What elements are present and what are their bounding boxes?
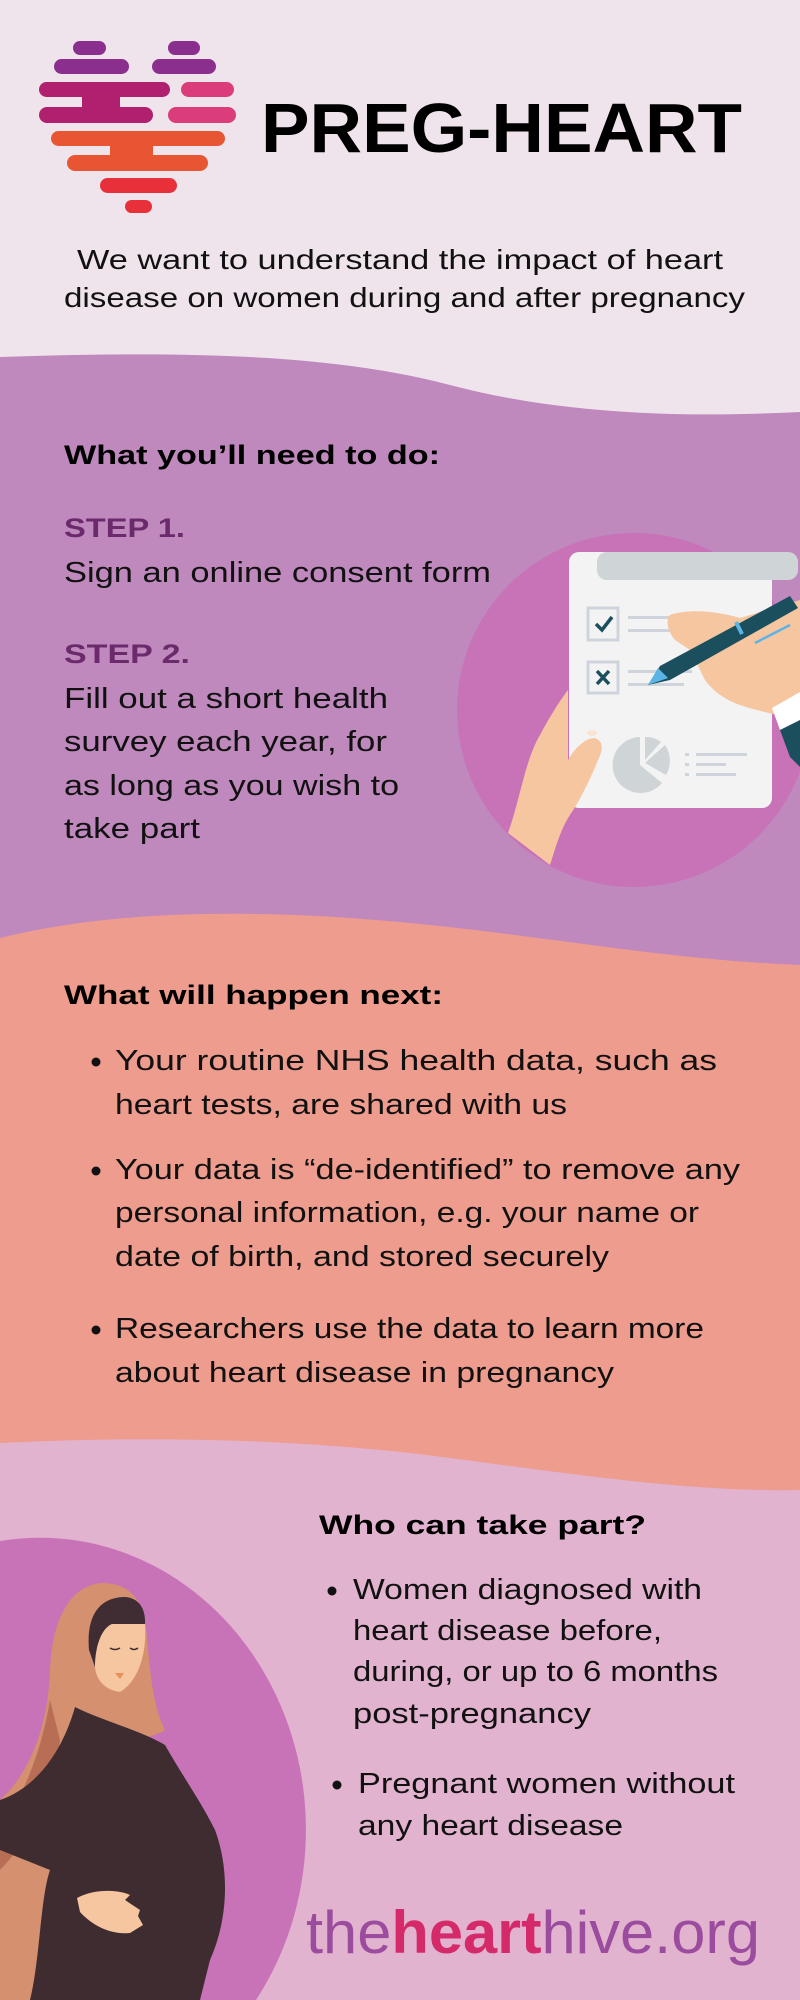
subtitle	[64, 244, 745, 313]
illustration: hands filling out form	[457, 533, 800, 887]
heading: what will happen next: What will happen next:	[64, 980, 443, 1010]
bullet list: eligibility: Women diagnosed with	[353, 1574, 702, 1606]
bullet list: eligibility: during, or up to 6 months	[353, 1656, 718, 1688]
panel: who can take part	[0, 1510, 760, 2000]
step 1: Sign an online consent form	[64, 557, 491, 589]
bullet list: eligibility: Pregnant women without	[358, 1768, 735, 1800]
heading: who can take part: Who can take part?	[319, 1510, 646, 1540]
bullet list: eligibility: post-pregnancy	[353, 1698, 592, 1730]
step 2: survey each year, for	[64, 726, 387, 758]
bullet list: next steps: heart tests, are shared with us	[115, 1089, 567, 1121]
illustration: pregnant woman	[0, 1538, 306, 2000]
subtitle: We want to understand the impact of heart	[77, 244, 723, 275]
panel: what you'll need to do	[64, 440, 800, 887]
step 2: take part	[64, 813, 200, 845]
bullet list: next steps: Your data is “de-identified” to remove any	[115, 1154, 741, 1186]
bullet list: next steps: personal information, e.g. your name or	[115, 1197, 699, 1229]
footer: website: thehearthive.org	[306, 1899, 760, 1966]
heading: what you'll need to do: What you’ll need to do:	[64, 440, 440, 470]
step 2: STEP 2.	[64, 639, 190, 669]
step 2	[64, 639, 399, 845]
bullet list: next steps: Researchers use the data to learn more	[115, 1313, 704, 1345]
step 1: STEP 1.	[64, 513, 185, 543]
panel: what will happen next	[64, 980, 741, 1389]
bullet list: next steps: about heart disease in pregnancy	[115, 1357, 615, 1389]
bullet list: next steps: date of birth, and stored securely	[115, 1241, 610, 1273]
subtitle: disease on women during and after pregnancy	[64, 282, 745, 313]
title: PREG-HEART	[261, 89, 742, 167]
step 2: as long as you wish to	[64, 770, 399, 802]
step 1	[64, 513, 491, 589]
step 2: Fill out a short health	[64, 683, 388, 715]
bullet list: eligibility	[328, 1574, 735, 1842]
bullet list: eligibility: any heart disease	[358, 1810, 623, 1842]
bullet list: next steps	[92, 1045, 741, 1389]
bullet list: eligibility: heart disease before,	[353, 1615, 662, 1647]
bullet list: next steps: Your routine NHS health data, such as	[115, 1045, 717, 1077]
logo: heart	[39, 41, 236, 213]
